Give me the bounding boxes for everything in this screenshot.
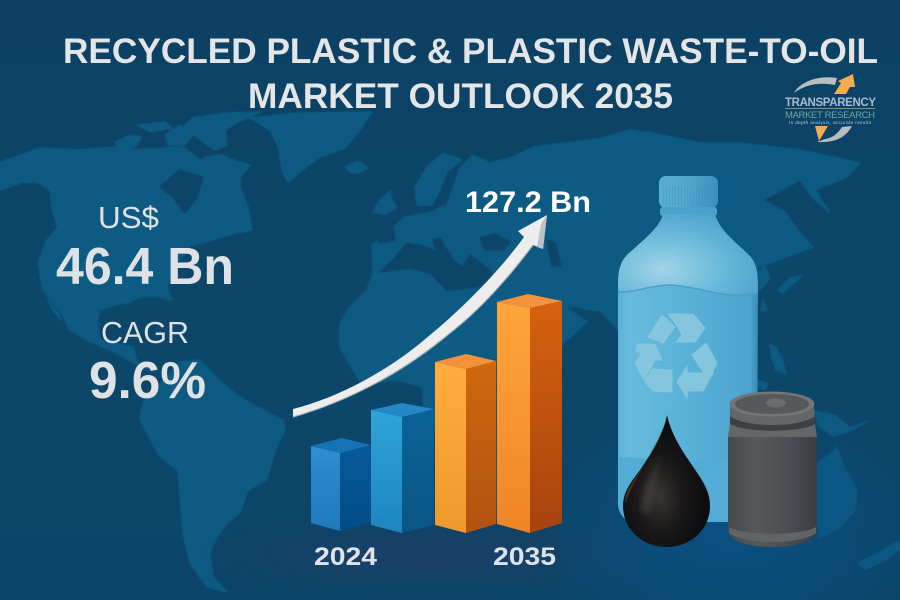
stat: market value 2024: US$ <box>98 200 159 235</box>
arctic islands <box>115 112 262 150</box>
scandinavia <box>415 153 462 205</box>
bottle neck <box>660 207 717 216</box>
title <box>63 32 878 116</box>
bar 1 <box>311 438 371 531</box>
growth arrow <box>293 215 547 417</box>
baja california <box>48 300 61 320</box>
recycling symbol <box>635 314 717 398</box>
title: RECYCLED PLASTIC & PLASTIC WASTE-TO-OIL <box>63 32 878 71</box>
bay of biscay <box>373 228 395 243</box>
new guinea <box>815 411 868 436</box>
north america <box>0 147 252 372</box>
bar 4 <box>497 294 562 533</box>
black sea <box>480 234 510 250</box>
united kingdom <box>373 191 397 214</box>
stat: market value 2024: 46.4 Bn <box>56 238 234 296</box>
hudson bay <box>160 170 203 213</box>
oil droplet <box>623 415 710 547</box>
stat: market value 2024 <box>56 200 234 296</box>
logo: transparency market research: MARKET RESEARCH <box>785 110 875 121</box>
year labels: 2035 <box>493 543 556 571</box>
year labels <box>314 543 556 571</box>
logo: transparency market research <box>785 74 876 142</box>
year labels: 2024 <box>314 543 377 571</box>
logo: transparency market research: TRANSPARENCY <box>785 97 876 109</box>
greenland <box>250 112 372 182</box>
right side glow <box>560 380 900 600</box>
oil canister <box>728 392 817 547</box>
logo: transparency market research: In depth analysis, accurate results <box>789 120 872 125</box>
caspian sea <box>547 240 561 266</box>
stat: cagr <box>89 315 206 410</box>
new zealand <box>858 541 899 569</box>
plastic bottle <box>618 176 758 522</box>
stat: cagr: CAGR <box>101 315 189 350</box>
japan and indonesia islands <box>757 265 802 390</box>
baltic sea <box>436 170 458 206</box>
eurasia and africa <box>340 130 860 520</box>
mediterranean sea <box>380 238 493 290</box>
title: MARKET OUTLOOK 2035 <box>248 77 673 116</box>
stat: cagr: 9.6% <box>89 352 206 410</box>
bar 2 <box>371 403 434 533</box>
bottle body <box>618 214 758 522</box>
bar chart <box>311 294 562 533</box>
bottle cap <box>659 176 718 208</box>
south america <box>140 360 285 592</box>
floor shading <box>190 511 670 599</box>
world map <box>0 112 899 592</box>
forecast value label: 127.2 Bn <box>465 186 591 219</box>
iceland <box>345 161 368 173</box>
australia <box>815 447 857 538</box>
bar 3 <box>435 354 496 533</box>
